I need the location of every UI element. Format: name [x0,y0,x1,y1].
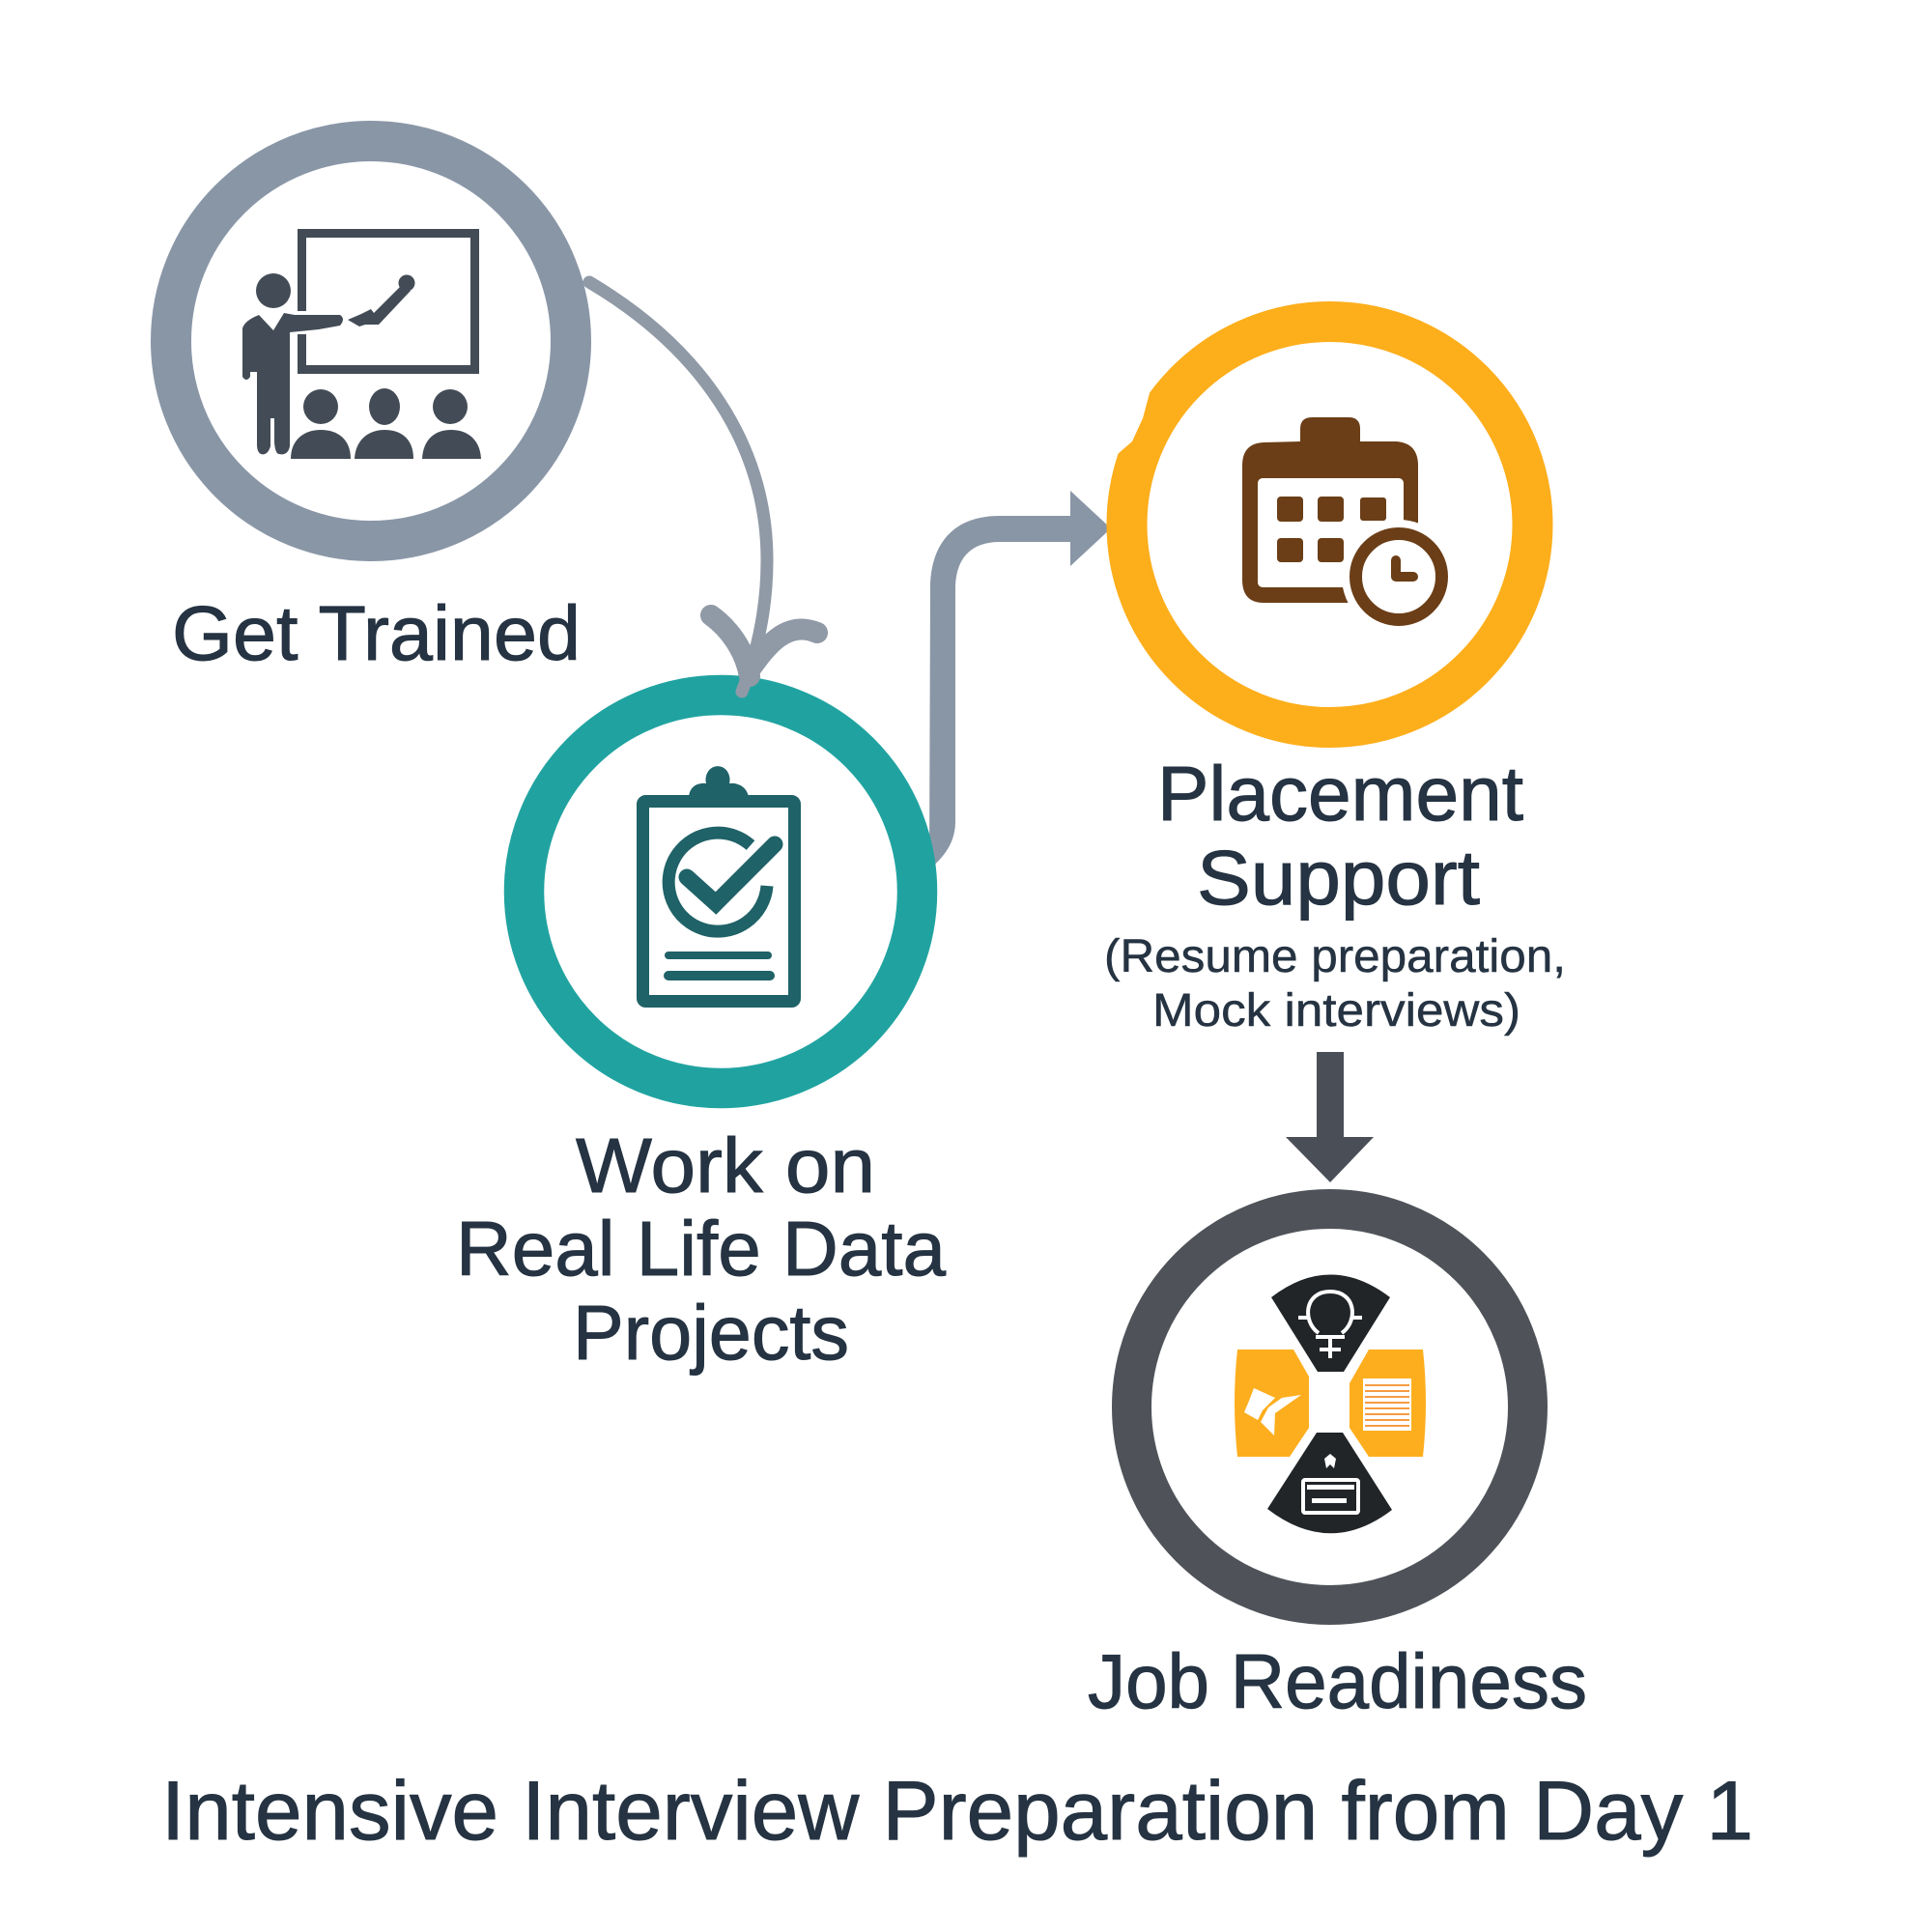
ring: get trained [171,141,571,541]
label: placement support [1157,751,1523,921]
sub-label: resume preparation, mock interviews [1104,931,1566,1037]
step 4: job readiness [1088,1209,1587,1724]
arrow: elbow from projects to placement [929,491,1111,869]
label: placement support: Support [1197,835,1480,921]
icon: clipboard with check [643,766,794,1001]
step 2: work on real life data projects [456,696,947,1376]
title: Intensive Interview Preparation from Day 1 [161,1765,1753,1858]
label: work on real life data projects [456,1122,947,1376]
label: placement support: Placement [1157,751,1523,837]
label: get trained: Get Trained [172,590,581,676]
icon: calendar with clock [1242,417,1456,634]
step 3: placement support [1101,322,1566,1037]
icon: four-part readiness emblem [1235,1275,1426,1533]
label: job readiness: Job Readiness [1088,1638,1587,1724]
sub-label: resume preparation, mock interviews: (Resume preparation, [1104,931,1566,982]
sub-label: resume preparation, mock interviews: Mock interviews) [1152,985,1520,1037]
icon: presenter with audience [242,234,481,459]
notch in orange ring outline [1101,382,1150,454]
ring: placement [1126,322,1532,727]
label: work on real life data projects: Real Life Data [456,1206,947,1292]
arrow: down to job readiness [1286,1052,1374,1182]
arrow: curved from get trained to projects [589,282,817,692]
ring: projects [524,696,918,1088]
label: work on real life data projects: Projects [573,1290,849,1376]
label: work on real life data projects: Work on [576,1122,875,1208]
step 1: get trained [171,141,581,676]
ring: job readiness [1132,1209,1528,1605]
